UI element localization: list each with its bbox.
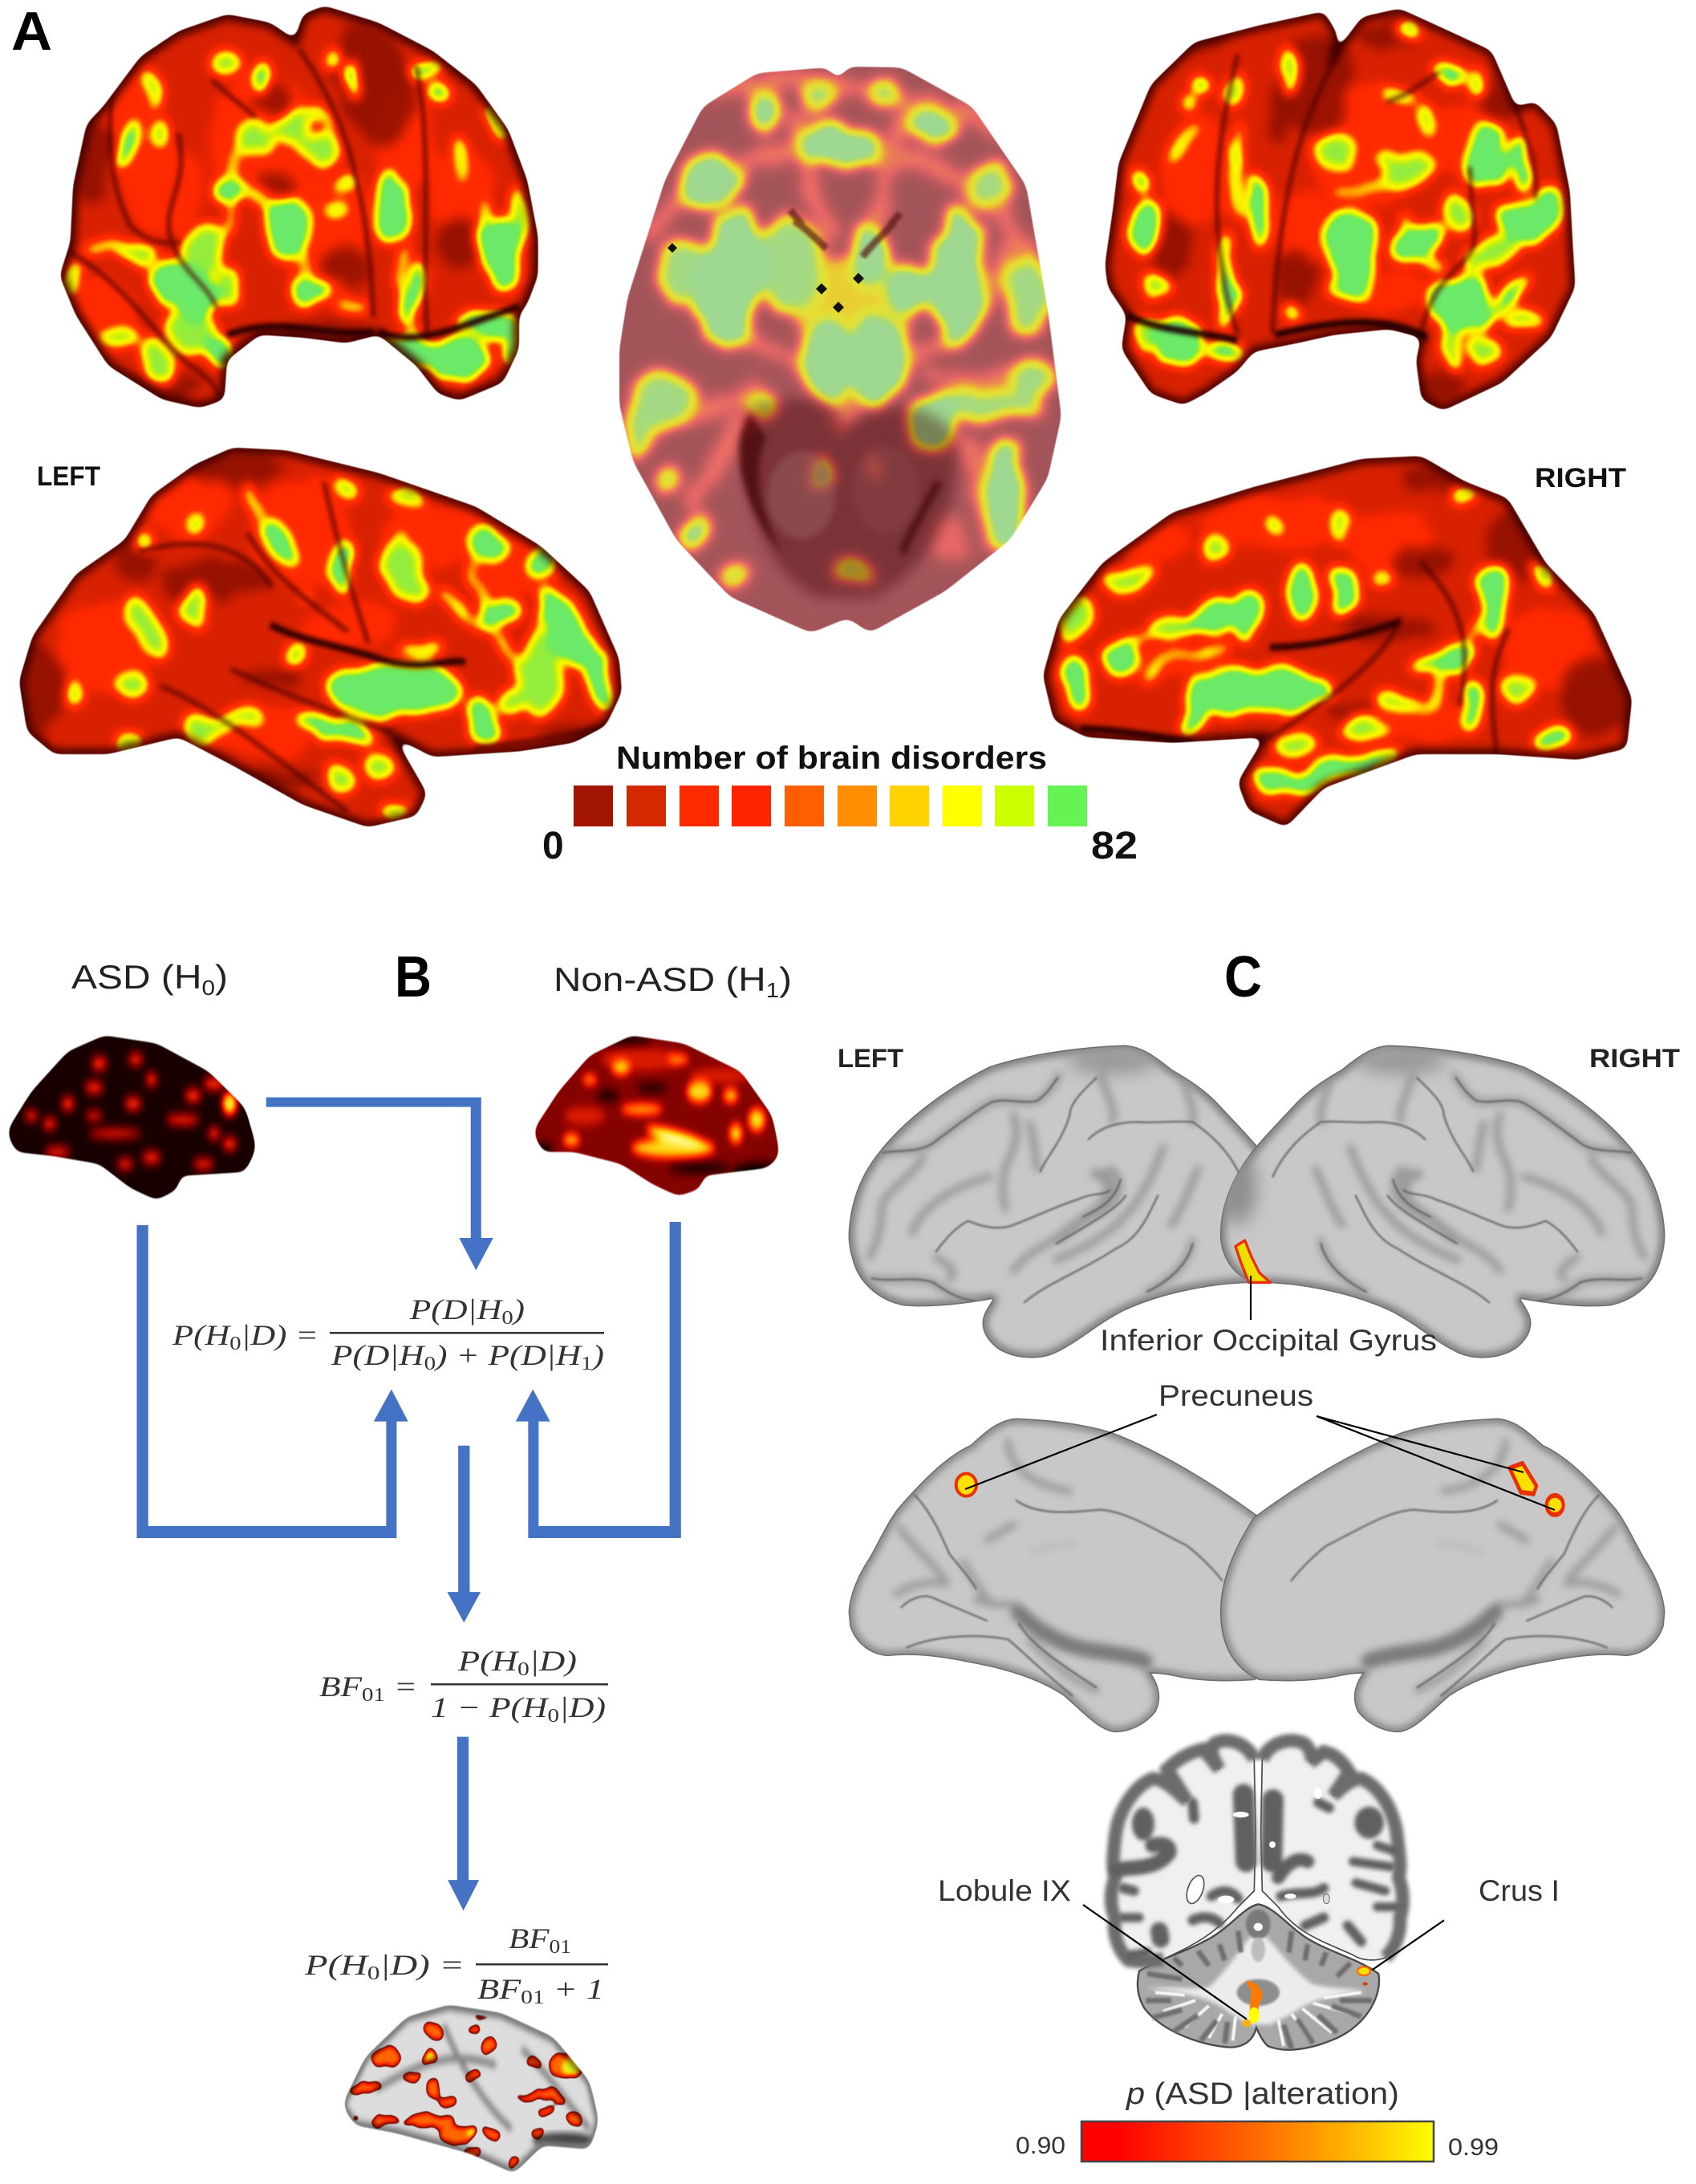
equation: posterior probability — [172, 1293, 604, 1374]
label RIGHT: RIGHT — [1535, 463, 1626, 493]
label: precuneus with leaders: Precuneus — [1158, 1379, 1313, 1412]
brain: right posterior view heat map — [1105, 9, 1576, 409]
equation: Bayes factor: = — [385, 1670, 417, 1703]
heading ASD H0: 0 — [202, 976, 215, 1000]
heading Non-ASD H1: 1 — [766, 978, 779, 1002]
equation: Bayes factor: 01 — [362, 1685, 385, 1706]
arrow: non-ASD map up to denominator — [516, 1222, 681, 1538]
label RIGHT: RIGHT — [1589, 1044, 1681, 1073]
scale maximum: 82 — [1091, 825, 1138, 867]
cerebellum — [1138, 1904, 1379, 2050]
equation: posterior probability: P(D|H — [410, 1293, 487, 1325]
left medial surface — [849, 1419, 1292, 1731]
equation: posterior probability: 0 — [229, 1334, 241, 1354]
label LEFT: LEFT — [838, 1044, 903, 1073]
panel: C cortical results — [838, 945, 1681, 2162]
brain: left posterior view heat map — [60, 6, 539, 408]
panel: A brain disorder maps — [0, 0, 1675, 872]
left lateral surface — [849, 1045, 1292, 1358]
equation: Bayes factor: 0 — [517, 1659, 529, 1680]
heading Non-ASD H1: ) — [779, 960, 792, 998]
equation: probability from Bayes factor: 01 — [521, 1987, 545, 2008]
colour bar: p (ASD | alteration): p (ASD |alteration) — [1126, 2077, 1399, 2111]
colour bar: p (ASD | alteration): 0.90 — [1016, 2133, 1065, 2159]
label: lobule IX: Lobule IX — [938, 1874, 1071, 1907]
equation: probability from Bayes factor: P(H — [305, 1949, 353, 1981]
legend title: Number of brain disorders — [616, 741, 1047, 776]
colour bar: p (ASD | alteration) — [1016, 2077, 1499, 2162]
legend: number of brain disorders — [542, 741, 1138, 867]
right hemisphere — [1261, 1740, 1403, 1960]
equation: posterior probability: P(D|H — [331, 1339, 408, 1371]
brains: medial surfaces — [849, 1419, 1665, 1731]
arrow: ASD map to equation — [266, 1098, 493, 1270]
coronal MRI slice — [1083, 1740, 1444, 2050]
right medial surface — [1221, 1419, 1665, 1731]
activation: lobule IX — [1243, 1980, 1263, 2027]
heading Non-ASD H1: Non-ASD (H — [554, 960, 740, 998]
brain: thresholded posterior map — [344, 2004, 598, 2173]
equation: Bayes factor — [319, 1645, 608, 1727]
equation: posterior probability: P(H — [172, 1319, 221, 1351]
arrow: ASD map up to denominator — [136, 1225, 408, 1538]
equation: probability from Bayes factor: 0 — [367, 1963, 380, 1984]
equation: probability from Bayes factor: BF — [509, 1922, 544, 1955]
arrow: posterior to Bayes factor — [447, 1446, 481, 1622]
label: precuneus with leaders — [965, 1379, 1555, 1510]
equation: Bayes factor: |D) — [529, 1645, 577, 1677]
equation: posterior probability: ) — [590, 1339, 604, 1371]
scale minimum: 0 — [542, 825, 564, 867]
equation: posterior probability: 0 — [501, 1308, 513, 1329]
equation: probability from Bayes factor: |D) = — [380, 1949, 465, 1981]
label: inferior occipital gyrus: Inferior Occipital Gyrus — [1100, 1324, 1437, 1357]
brain: non-ASD map — [534, 1035, 778, 1196]
equation: posterior probability: 0 — [424, 1354, 436, 1374]
equation: posterior probability: ) — [511, 1293, 525, 1325]
label LEFT: LEFT — [37, 461, 100, 492]
equation: Bayes factor: 0 — [548, 1706, 559, 1727]
panel label C: C — [1224, 945, 1262, 1009]
panel: B Bayesian flow — [0, 945, 804, 2184]
activation: crus I — [1357, 1967, 1370, 1986]
equation: Bayes factor: BF — [319, 1670, 355, 1703]
equation: posterior probability: |D) = — [241, 1319, 319, 1351]
leader lines — [1083, 1905, 1444, 2020]
equation: Bayes factor: |D) — [559, 1691, 606, 1723]
colour bar: p (ASD | alteration): 0.99 — [1448, 2134, 1499, 2161]
heading ASD H0: ASD (H — [71, 958, 185, 996]
label: crus I: Crus I — [1479, 1874, 1560, 1907]
panel label A: A — [11, 1, 52, 62]
equation: posterior probability: ) + P(D|H — [434, 1339, 582, 1371]
activation: inferior occipital gyrus — [1235, 1240, 1270, 1282]
equation: posterior probability: 1 — [581, 1354, 593, 1374]
equation: Bayes factor: 1 − P(H — [431, 1691, 527, 1723]
brain: right lateral view heat map — [1043, 456, 1632, 826]
arrow: Bayes factor to probability — [448, 1737, 479, 1910]
equation: Bayes factor: P(H — [458, 1645, 506, 1677]
right lateral surface — [1219, 1045, 1665, 1358]
activation: right precuneus spots — [1510, 1463, 1564, 1515]
panel label B: B — [395, 945, 432, 1009]
left hemisphere — [1111, 1740, 1256, 1962]
heading ASD H0: ) — [215, 958, 228, 996]
equation: probability from Bayes factor — [304, 1922, 608, 2008]
equation: probability from Bayes factor: BF — [477, 1973, 513, 2005]
brain: axial slice heat map — [619, 66, 1061, 632]
brain: ASD map — [8, 1035, 255, 1200]
activation: left precuneus spot — [956, 1474, 976, 1496]
brains: lateral surfaces — [849, 1045, 1665, 1358]
equation: probability from Bayes factor: + 1 — [545, 1973, 604, 2005]
equation: probability from Bayes factor: 01 — [549, 1937, 571, 1958]
brain: left lateral view heat map — [19, 448, 623, 826]
